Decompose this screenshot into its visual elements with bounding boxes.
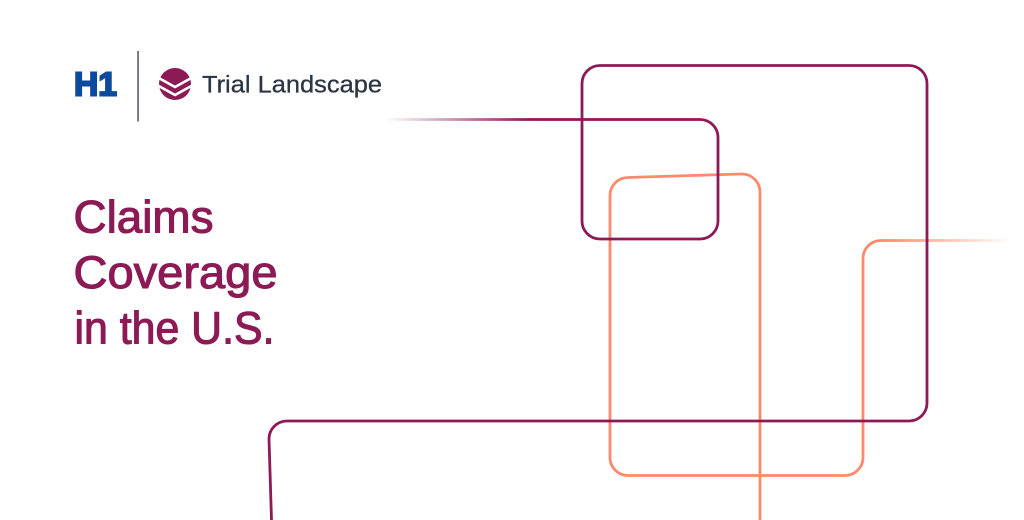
title: in the U.S. [74, 302, 274, 354]
plum continuous rounded line [269, 66, 927, 520]
logo divider [137, 51, 139, 122]
title: Coverage [74, 247, 278, 298]
icon: Trial Landscape layered mark [156, 68, 194, 100]
title: Claims [74, 192, 214, 242]
title [74, 192, 278, 354]
logo: H1: H1 [74, 66, 117, 102]
orange continuous rounded line [610, 174, 1012, 520]
logo wordmark: Trial Landscape [202, 72, 382, 98]
